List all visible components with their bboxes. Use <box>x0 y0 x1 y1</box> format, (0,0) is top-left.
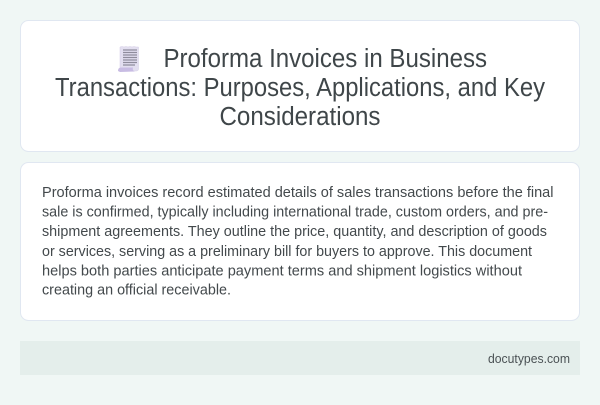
description text: Proforma invoices record estimated details of sales transactions before the final <box>42 185 554 201</box>
description text: sale is confirmed, typically including international trade, custom orders, and pre- <box>42 205 548 221</box>
description text: helps both parties anticipate payment terms and shipment logistics without <box>42 263 522 279</box>
title: Considerations <box>220 103 380 131</box>
icon: invoice document <box>118 46 138 72</box>
panel: description card <box>20 162 580 320</box>
title: Transactions: Purposes, Applications, and Key <box>55 74 545 102</box>
footer source text: docutypes.com <box>488 351 570 366</box>
panel: title card <box>20 20 580 152</box>
description text: shipment agreements. They outline the price, quantity, and description of goods <box>42 224 547 240</box>
description text: or services, serving as a preliminary bill for buyers to approve. This document <box>42 244 532 260</box>
title: Proforma Invoices in Business <box>164 45 487 73</box>
title <box>55 45 545 131</box>
footer bar <box>20 341 580 375</box>
description text: creating an official receivable. <box>42 282 231 298</box>
description text <box>42 185 554 298</box>
